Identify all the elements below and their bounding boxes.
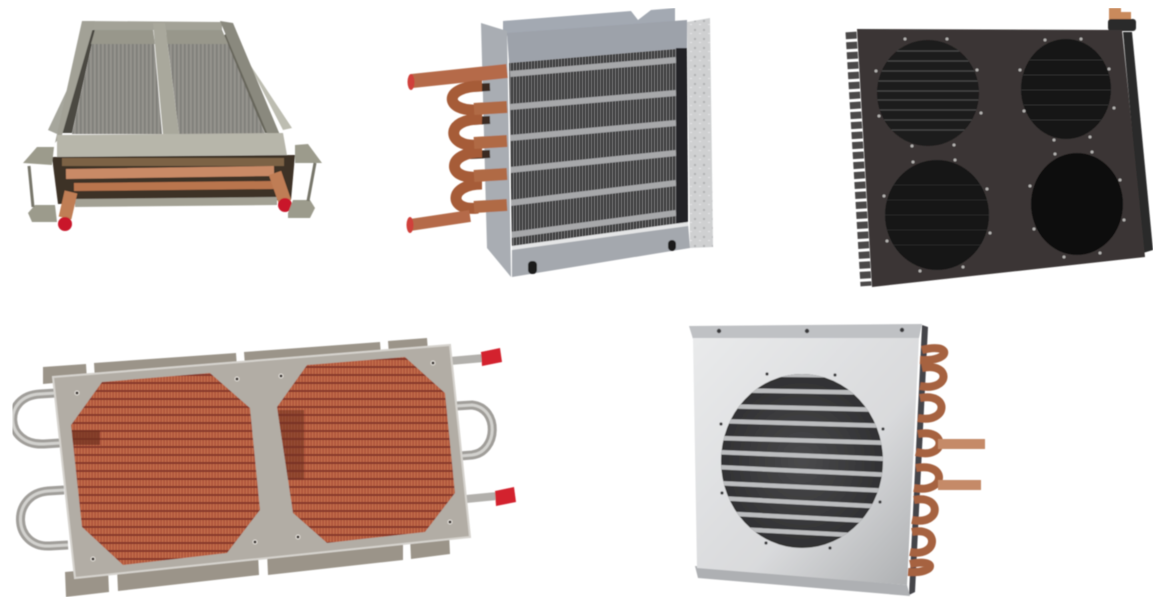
fin pack left [72, 30, 162, 134]
right outlet tubes [450, 358, 484, 361]
coil tubes [510, 60, 676, 235]
plate bolts [717, 328, 904, 550]
fan opening top right [1021, 39, 1111, 139]
panel rivets [874, 38, 1126, 272]
right bracket [288, 144, 322, 218]
copper return bends [908, 348, 944, 572]
back top flange [503, 8, 675, 36]
copper risers [65, 192, 71, 218]
coil 4: copper-fin coil with stainless plate [13, 338, 516, 597]
right header column [1123, 32, 1153, 253]
fan opening top left [877, 40, 979, 146]
plate bolts [75, 361, 452, 561]
left rail [55, 21, 95, 143]
bottom mounting tabs [65, 532, 450, 597]
bottom flange [695, 566, 910, 596]
centre strut [153, 23, 179, 134]
top mounting tabs [43, 338, 428, 384]
right flange [687, 18, 713, 248]
coil 2: galvanized cased coil with copper return bends [406, 8, 713, 277]
top rail [84, 21, 222, 30]
front plate [693, 338, 919, 585]
right rail [220, 21, 280, 135]
red caps [481, 348, 502, 366]
black panel [857, 29, 1145, 287]
red end caps [58, 217, 72, 231]
left side panel [481, 23, 511, 277]
copper stubs [474, 107, 507, 207]
right fin pack [277, 357, 455, 543]
left return bends [851, 32, 866, 286]
copper inlet pipe [412, 71, 507, 81]
dark tube shadows [470, 87, 490, 155]
dark tray gaps [62, 30, 95, 133]
coil tubes [715, 374, 890, 537]
copper return bends [452, 86, 482, 208]
copper fittings [1109, 8, 1121, 20]
left U tubes [13, 393, 492, 546]
dark side edge [909, 325, 928, 595]
left bracket [23, 147, 57, 222]
top flange [689, 324, 922, 339]
bottom front panel [512, 223, 690, 277]
fin shading [72, 430, 100, 445]
right U tube [456, 405, 492, 456]
mounting slots [528, 261, 537, 274]
left side flange [48, 73, 81, 134]
stainless plate [53, 345, 470, 578]
coil fins [509, 48, 688, 248]
U tube highlights [13, 393, 492, 546]
copper stubs [938, 439, 985, 449]
copper outlet pipe [410, 216, 470, 225]
right side flange [233, 33, 292, 130]
fan opening bottom left [885, 160, 989, 270]
front bar [57, 133, 287, 157]
coil 1: flat stainless tray coil with copper headers [23, 21, 322, 231]
fin pack right [166, 30, 265, 134]
fan opening [721, 374, 883, 548]
coil 3: black four-fan condenser coil [851, 8, 1153, 287]
copper header tubes [66, 171, 274, 174]
top front panel [507, 20, 687, 63]
coil 5: galvanized single-fan coil with copper bends [689, 324, 985, 596]
front header box [52, 155, 295, 204]
fan opening bottom right [1031, 153, 1123, 255]
left fin pack [71, 373, 260, 565]
